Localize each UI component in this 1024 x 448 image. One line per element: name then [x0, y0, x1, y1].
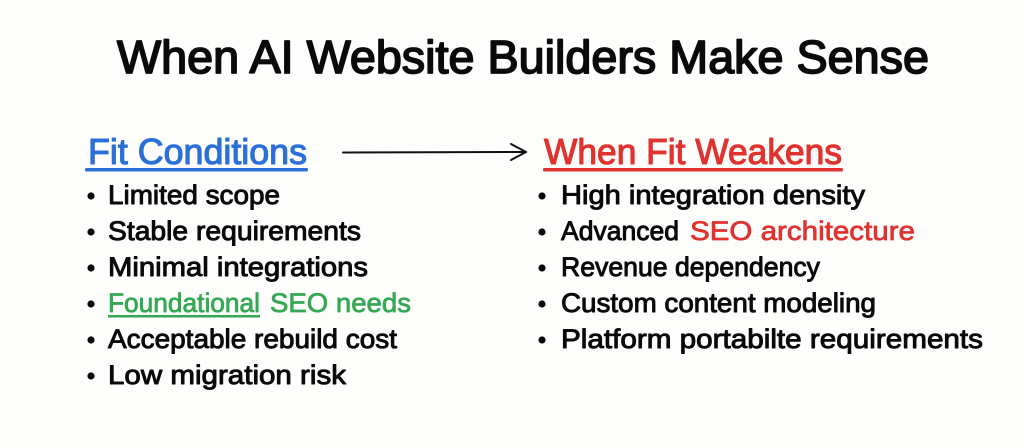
list item: Foundational SEO needs: SEO needs — [270, 288, 411, 318]
title: When AI Website Builders Make Sense — [117, 31, 929, 83]
list item: Foundational SEO needs: Foundational — [108, 288, 260, 318]
panel: when fit weakens — [538, 131, 983, 354]
heading: Fit Conditions: Fit Conditions — [88, 131, 307, 172]
list item: Advanced SEO architecture — [538, 216, 915, 246]
list item: Revenue dependency: Revenue dependency — [561, 252, 820, 282]
list item: Low migration risk: Low migration risk — [108, 360, 347, 390]
list item: Minimal integrations: Minimal integrations — [108, 252, 368, 282]
list item: Advanced SEO architecture: SEO architecture — [690, 216, 915, 246]
panel: fit conditions — [85, 131, 411, 390]
list item: Limited scope: Limited scope — [108, 180, 280, 210]
list item: Custom content modeling: Custom content modeling — [561, 288, 876, 318]
list item: Platform portabilte requirements: Platform portabilte requirements — [561, 324, 983, 354]
heading: When Fit Weakens: When Fit Weakens — [544, 131, 842, 172]
list item: Stable requirements: Stable requirements — [108, 216, 361, 246]
list item: Foundational SEO needs — [87, 288, 411, 318]
list item: Advanced SEO architecture: Advanced — [561, 216, 679, 246]
list item: Acceptable rebuild cost: Acceptable rebuild cost — [108, 324, 398, 354]
arrow — [343, 144, 526, 160]
list item: High integration density: High integration density — [561, 180, 866, 210]
